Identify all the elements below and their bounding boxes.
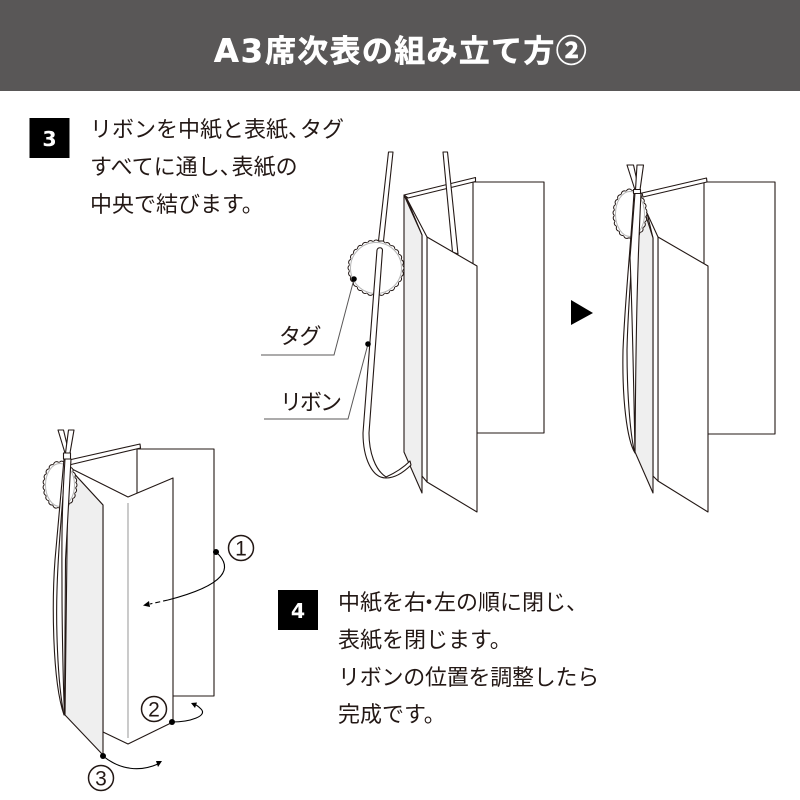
ribbon tail: outer [53, 459, 66, 715]
number 3: 3 [95, 768, 107, 790]
step 4 text: 表紙を閉じます。 [338, 628, 512, 652]
diagram: ribbon tied [614, 165, 775, 512]
narrow inner panel [406, 197, 427, 482]
label: tag: タグ [279, 324, 322, 349]
ribbon ends [58, 430, 69, 453]
back cover [473, 182, 544, 433]
arrow 1 [143, 549, 225, 607]
step 4 text: 完成です。 [338, 702, 446, 727]
arrow 3 [100, 753, 162, 769]
label: ribbon: リボン [280, 390, 341, 415]
step 4 badge: 4 [291, 599, 305, 623]
top strip [642, 178, 707, 197]
knot [634, 190, 640, 194]
number 2: 2 [148, 698, 160, 722]
diagram: ribbon through tag, untied [350, 152, 544, 512]
step 3 text: 中央で結びます。 [90, 192, 264, 217]
inner panels [68, 467, 173, 744]
number 1 [228, 536, 254, 560]
tag [44, 462, 76, 508]
ribbon tail: front [62, 459, 71, 715]
step 3 text: タグ [300, 117, 344, 142]
grey panel [404, 195, 422, 493]
label: tag [261, 276, 357, 355]
number 2 [142, 696, 166, 722]
knot [64, 453, 70, 459]
step 4 text: リボンの位置を調整したら [338, 665, 599, 690]
tag [350, 242, 402, 294]
arrow 2 [169, 702, 203, 725]
arrow: next state [571, 300, 593, 325]
grey panel [65, 467, 103, 755]
header band [0, 0, 800, 91]
front panel [658, 237, 708, 512]
front panel [427, 237, 477, 512]
step 4 badge [278, 590, 318, 630]
right ribbon end [443, 152, 458, 254]
step 4 text: ・左の順に閉じ、 [418, 590, 588, 615]
step 3 text: 表紙の [232, 154, 298, 180]
step 4 text: 中紙を右 [338, 590, 426, 615]
number 3 [88, 766, 114, 790]
number 1: 1 [235, 538, 247, 560]
grey panel [635, 213, 653, 493]
ribbon ends [627, 165, 639, 190]
step 3 badge: 3 [42, 127, 57, 151]
narrow inner panel [647, 213, 658, 481]
ribbon tail: front [630, 193, 641, 452]
step 3 badge [30, 118, 70, 158]
ribbon loop [363, 248, 411, 478]
step 3 text: すべてに通し、 [90, 154, 242, 180]
step 3 text: リボンを中紙と表紙、 [90, 117, 310, 142]
title: 席次表の組み立て方② [265, 34, 588, 69]
diagram: closing steps [44, 430, 214, 755]
ribbon tail: outer [623, 193, 636, 453]
top strip [404, 178, 476, 198]
top strip [69, 444, 140, 465]
back cover [137, 449, 214, 696]
tag [614, 190, 646, 238]
title: A3 [214, 32, 265, 70]
centre fold [127, 503, 129, 738]
label: ribbon [264, 341, 371, 419]
left ribbon upper end [378, 152, 393, 241]
back cover [704, 182, 775, 434]
